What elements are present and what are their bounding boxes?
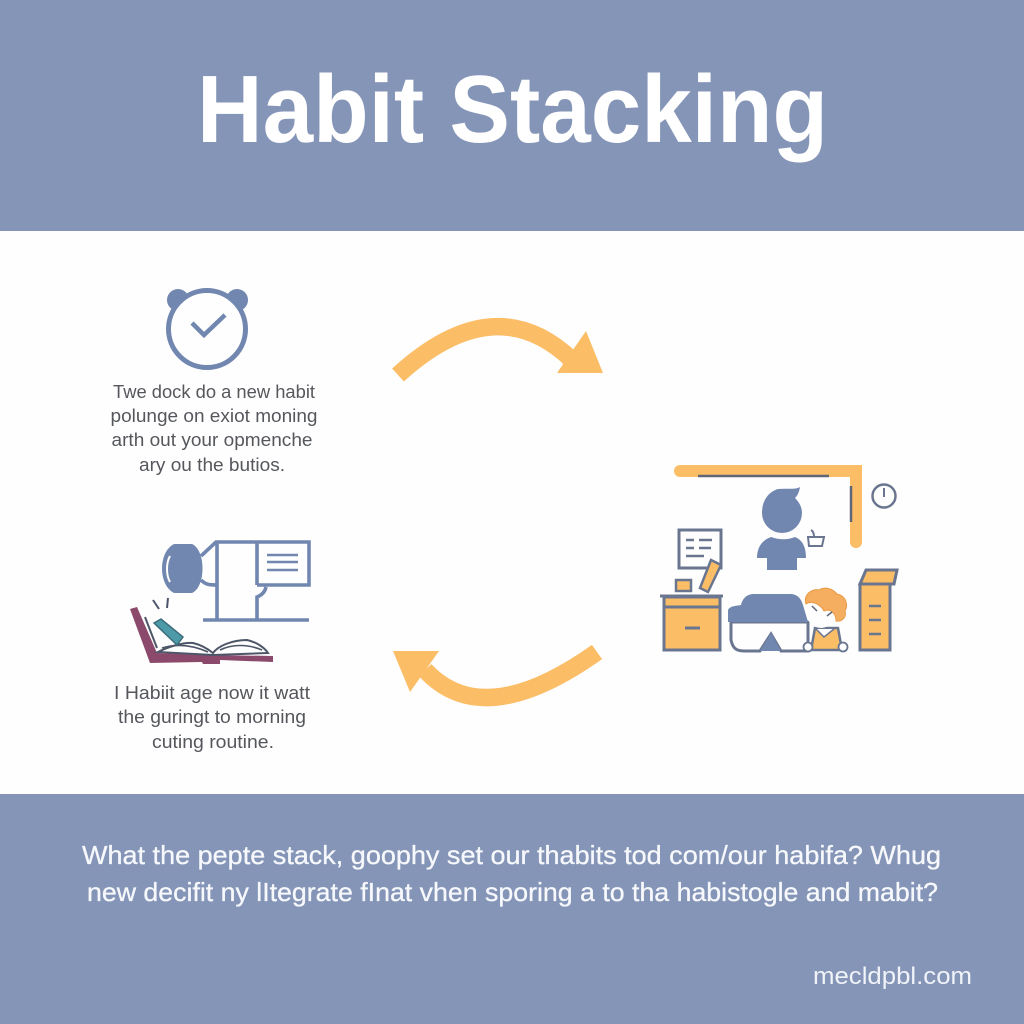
wall clock: [872, 484, 896, 508]
text block: second habit: [114, 683, 310, 752]
header band: [0, 0, 1024, 231]
note board: [679, 530, 721, 568]
child with curly hair: [804, 588, 848, 652]
text block: second habit: the guringt to morning: [118, 707, 306, 727]
footer question text: new decifit ny lItegrate fInat vhen sporing a to tha habistogle and mabit?: [87, 877, 938, 907]
footer url: mecldpbl.com: [813, 963, 972, 990]
footer question text: What the pepte stack, goophy set our thabits tod com/our habifa? Whug: [82, 840, 941, 870]
text block: first habit: Twe dock do a new habit: [113, 382, 315, 402]
person: [757, 487, 806, 570]
footer band: [0, 794, 1024, 1024]
small box: [676, 580, 691, 591]
text block: first habit: ary ou the butios.: [139, 455, 285, 475]
icon: alarm clock with check: [167, 289, 248, 368]
desk drawer: [660, 596, 723, 650]
icon: desk screen and open book: [130, 542, 309, 664]
filing cabinet: [860, 570, 897, 650]
text block: first habit: polunge on exiot moning: [110, 406, 318, 426]
tilted bottle: [700, 560, 721, 592]
title: Habit Stacking: [197, 56, 828, 163]
shelf bracket: [680, 471, 856, 542]
arrow: top curved right: [398, 327, 603, 375]
sofa: [728, 594, 808, 651]
arrow: bottom curved left: [393, 651, 597, 698]
text block: first habit: [110, 382, 318, 475]
text block: second habit: I Habiit age now it watt: [114, 683, 310, 703]
illustration: person at desk scene: [660, 471, 897, 652]
text block: second habit: cuting routine.: [152, 732, 274, 752]
text block: first habit: arth out your opmenche: [112, 430, 312, 450]
small cup: [808, 530, 824, 546]
footer question text: [82, 840, 941, 907]
